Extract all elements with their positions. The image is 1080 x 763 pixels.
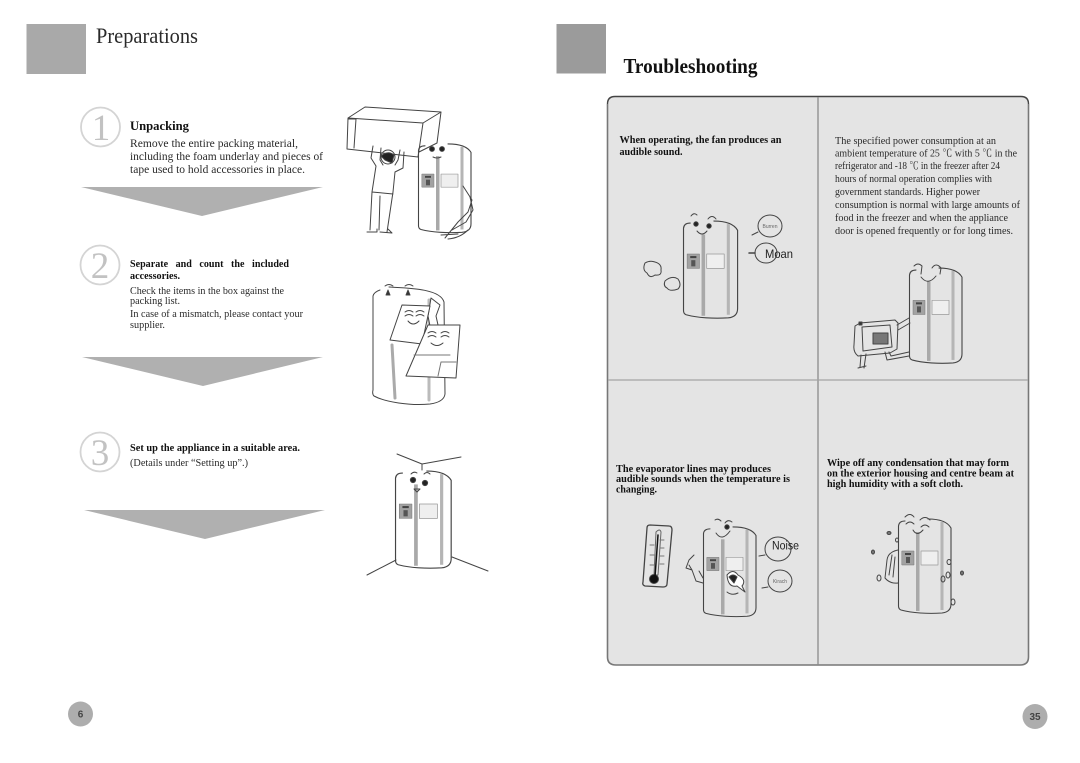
- arrow 1: [81, 187, 323, 216]
- header square: preparations: [26, 24, 86, 74]
- step number 2: 2: [91, 246, 109, 287]
- power consumption text: government standards. Higher power: [835, 187, 980, 198]
- cell: condensation: [827, 458, 1014, 613]
- step 1 heading: Unpacking: [130, 118, 189, 133]
- fan sound text: When operating, the fan produces an: [620, 135, 782, 146]
- label: moan: Moan: [765, 247, 793, 261]
- step 2 body text: In case of a mismatch, please contact your: [130, 309, 303, 320]
- arrow 3: [84, 510, 325, 539]
- power consumption text: hours of normal operation complies with: [835, 174, 993, 185]
- troubleshooting grid background: [608, 96, 1028, 665]
- condensation text: high humidity with a soft cloth.: [827, 479, 963, 490]
- title: preparations: Preparations: [96, 23, 198, 48]
- page number 35: [1022, 704, 1048, 729]
- step number 1: 1: [92, 108, 110, 149]
- evaporator text: audible sounds when the temperature is: [616, 474, 790, 485]
- step 1 body text: including the foam underlay and pieces of: [130, 149, 323, 163]
- step 2 heading: accessories.: [130, 271, 180, 282]
- illustration: moaning refrigerator: [644, 214, 782, 318]
- step 3 body text: (Details under “Setting up”.): [130, 458, 248, 469]
- power consumption text: The specified power consumption at an: [835, 136, 997, 147]
- step 2: [80, 246, 303, 331]
- arrow 2: [82, 357, 323, 386]
- condensation text: [827, 458, 1014, 490]
- power consumption text: ambient temperature of 25 ℃ with 5 ℃ in the: [835, 148, 1017, 160]
- step 2 body text: supplier.: [130, 320, 165, 331]
- illustration: thermometer: [643, 525, 672, 587]
- illustration: refrigerator with power meter: [854, 264, 962, 368]
- step 2 heading: [130, 259, 289, 282]
- power consumption text: door is opened frequently or for long times.: [835, 226, 1013, 237]
- power consumption text: refrigerator and -18 ℃ in the freezer after 24: [835, 160, 1001, 172]
- power consumption text: food in the freezer and when the appliance: [835, 213, 1008, 224]
- panel: preparations page: [26, 23, 488, 726]
- title: troubleshooting: Troubleshooting: [624, 54, 758, 78]
- step 2 body text: packing list.: [130, 296, 180, 307]
- page number 35: 35: [1029, 712, 1041, 723]
- power consumption text: consumption is normal with large amounts of: [835, 200, 1020, 211]
- panel: troubleshooting page: [556, 24, 1048, 729]
- header square: troubleshooting: [556, 24, 606, 74]
- step 2 heading: Separate and count the included: [130, 259, 289, 270]
- illustration: man lifting box off refrigerator: [347, 107, 473, 239]
- step 1 body text: [130, 136, 323, 176]
- fan sound text: audible sound.: [620, 147, 683, 158]
- power consumption text: [835, 136, 1020, 237]
- illustration: refrigerator with manuals: [373, 284, 460, 405]
- condensation text: on the exterior housing and centre beam at: [827, 468, 1014, 480]
- step 3 heading: Set up the appliance in a suitable area.: [130, 443, 300, 454]
- step 3: [80, 432, 300, 474]
- step number 1: [81, 108, 120, 149]
- step 2 body text: Check the items in the box against the: [130, 286, 284, 297]
- illustration: refrigerator with pointing finger: [686, 519, 792, 617]
- evaporator text: The evaporator lines may produces: [616, 464, 771, 475]
- cell: power consumption: [835, 136, 1020, 368]
- illustration: refrigerator in corner: [367, 454, 488, 575]
- evaporator text: changing.: [616, 484, 657, 496]
- cell: fan sound: [620, 135, 793, 318]
- step number 3: [80, 432, 120, 474]
- label: noise: Noise: [772, 540, 799, 552]
- illustration: refrigerator with pointing finger: Kirach: [773, 579, 787, 585]
- cell: evaporator lines: [616, 464, 799, 617]
- illustration: moaning refrigerator: Burren: [762, 224, 778, 230]
- step 2 body text: [130, 286, 303, 331]
- page number 6: [68, 702, 93, 726]
- condensation text: Wipe off any condensation that may form: [827, 458, 1009, 469]
- step 1 body text: tape used to hold accessories in place.: [130, 162, 305, 176]
- step 1: [81, 108, 323, 176]
- step number 2: [80, 246, 120, 287]
- step number 3: 3: [91, 433, 109, 474]
- evaporator text: [616, 464, 790, 496]
- page number 6: 6: [78, 710, 84, 720]
- illustration: refrigerator with condensation drops: [872, 514, 964, 613]
- fan sound text: [620, 135, 782, 158]
- step 1 body text: Remove the entire packing material,: [130, 136, 298, 150]
